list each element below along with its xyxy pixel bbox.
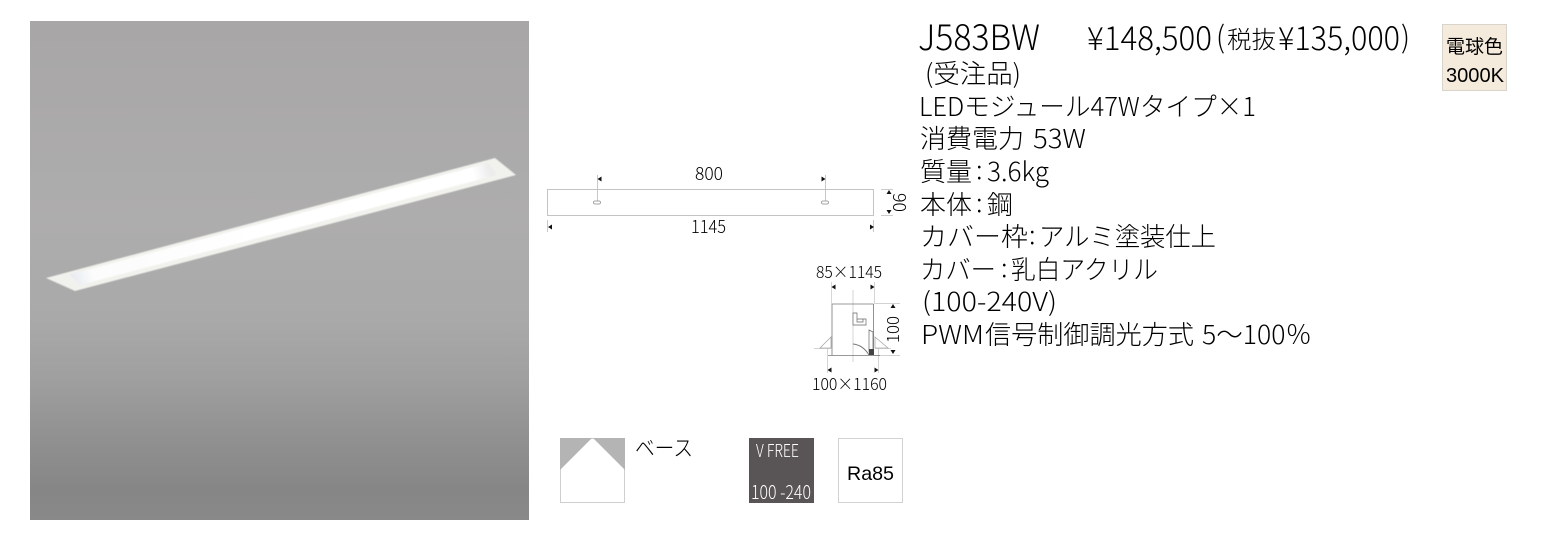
price: ( xyxy=(1216,13,1225,57)
weight: 質量 xyxy=(920,152,972,189)
price: ¥135,000 xyxy=(1278,14,1400,60)
color temperature badge: 電球色 xyxy=(1446,32,1503,59)
light fixture frame xyxy=(46,158,516,291)
icon: base color swatch xyxy=(560,438,625,502)
LED module: LEDモジュール47Wタイプ×1 xyxy=(919,87,1256,124)
weight: 3.6kg xyxy=(987,152,1049,189)
cover material xyxy=(920,248,1158,287)
body material: 鋼 xyxy=(987,185,1013,222)
icon: V FREE voltage badge xyxy=(749,437,814,505)
price: ) xyxy=(1401,13,1410,57)
dimension label: 1145: 1145 xyxy=(691,214,726,239)
label: 85×1145: 85×1145 xyxy=(816,259,882,283)
dimension drawing: top view xyxy=(548,161,912,239)
cover material: 乳白アクリル xyxy=(1011,250,1158,287)
icon: V FREE voltage badge: V FREE xyxy=(756,437,799,463)
dimming: PWM xyxy=(921,315,984,352)
body material xyxy=(920,183,1013,222)
dimension drawing: cross section xyxy=(812,259,904,395)
dimension label: 90: 90 xyxy=(887,193,912,212)
body material: 本体 xyxy=(920,185,972,222)
dimming: 信号制御調光方式 xyxy=(985,315,1194,352)
photo: recessed linear ceiling light xyxy=(30,21,529,520)
weight xyxy=(920,150,1049,189)
model number: J583BW xyxy=(918,10,1040,61)
light diffuser xyxy=(70,163,497,285)
dimension label: 800: 800 xyxy=(695,161,723,186)
power consumption xyxy=(920,119,1086,156)
product specification text xyxy=(918,10,1410,352)
color temperature badge: 3000K xyxy=(1446,65,1505,87)
order note: (受注品) xyxy=(925,54,1021,91)
price: ¥148,500 xyxy=(1087,14,1212,60)
price xyxy=(1087,13,1410,60)
power consumption: 消費電力 xyxy=(920,119,1024,156)
cover frame material: アルミ塗装仕上 xyxy=(1039,217,1216,254)
price: 税抜 xyxy=(1227,20,1276,55)
cover frame material xyxy=(920,215,1216,254)
dimming xyxy=(921,315,1312,352)
cover material: : xyxy=(1001,248,1008,285)
color temperature badge xyxy=(1442,24,1506,90)
dimming: 5〜100％ xyxy=(1202,315,1312,352)
body material: : xyxy=(976,183,982,220)
icon: Ra85 badge: Ra85 xyxy=(847,463,894,485)
cover material: カバー xyxy=(920,250,996,287)
label: 100×1160: 100×1160 xyxy=(812,371,887,395)
label: base: ベース xyxy=(635,431,693,463)
voltage: (100-240V) xyxy=(922,282,1057,319)
cover frame material: : xyxy=(1029,215,1036,252)
icon: Ra85 badge xyxy=(838,438,902,502)
weight: : xyxy=(976,150,982,187)
label: 100: 100 xyxy=(880,316,904,343)
icon: V FREE voltage badge: 100 -240 xyxy=(751,478,811,505)
cover frame material: カバー枠 xyxy=(920,217,1028,254)
power consumption: 53W xyxy=(1033,119,1086,156)
